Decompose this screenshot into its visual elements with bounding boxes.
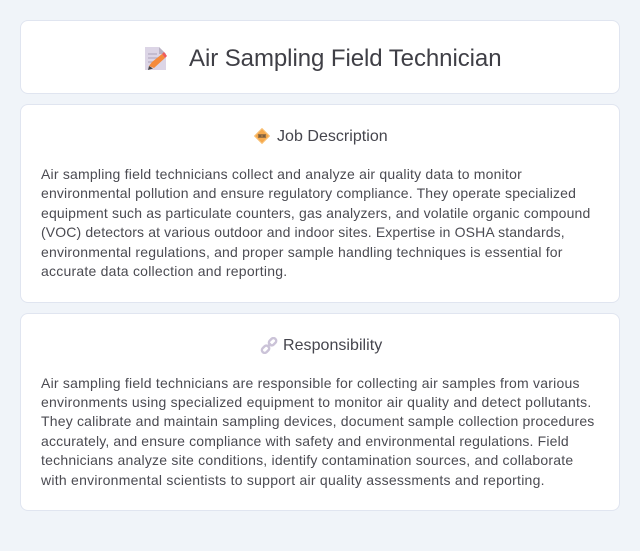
- text block: responsibility: accurately, and ensure compliance with safety and environmental regulations. Field: [41, 433, 569, 449]
- panel: responsibility: [20, 313, 620, 511]
- panel: title card: [20, 20, 620, 94]
- text block: responsibility: They calibrate and maintain sampling devices, document sample collection procedures: [41, 413, 594, 429]
- text block: responsibility: Air sampling field technicians are responsible for collecting air samples from various: [41, 375, 580, 391]
- text block: job description: accurate data collection and reporting.: [41, 263, 287, 279]
- heading: job description: Job Description: [277, 128, 388, 145]
- text block: job description: environmental regulations, and proper sample handling techniques is essential for: [41, 244, 563, 260]
- text block: responsibility: environments using specialized equipment to monitor air quality and detect pollutants.: [41, 394, 592, 410]
- text block: job description: Air sampling field technicians collect and analyze air quality data to monitor: [41, 166, 522, 182]
- text block: responsibility: technicians analyze site conditions, identify contamination sources, and collaborate: [41, 452, 573, 468]
- title: Air Sampling Field Technician: [189, 45, 502, 72]
- text block: job description: environmental pollution and ensure regulatory compliance. They operate specialized: [41, 185, 576, 201]
- icon: document with pencil: [145, 47, 167, 70]
- text block: job description: [41, 166, 590, 279]
- text block: job description: (VOC) detectors at various outdoor and indoor sites. Expertise in OSHA standards,: [41, 224, 565, 240]
- text block: responsibility: with environmental scientists to support air quality assessments and reporting.: [41, 472, 545, 488]
- icon: chain link: [260, 337, 278, 354]
- heading: responsibility: Responsibility: [283, 337, 382, 354]
- text block: job description: equipment such as particulate counters, gas analyzers, and volatile organic compound: [41, 205, 590, 221]
- panel: job description: [20, 104, 620, 303]
- icon: job description diamond: [254, 128, 270, 144]
